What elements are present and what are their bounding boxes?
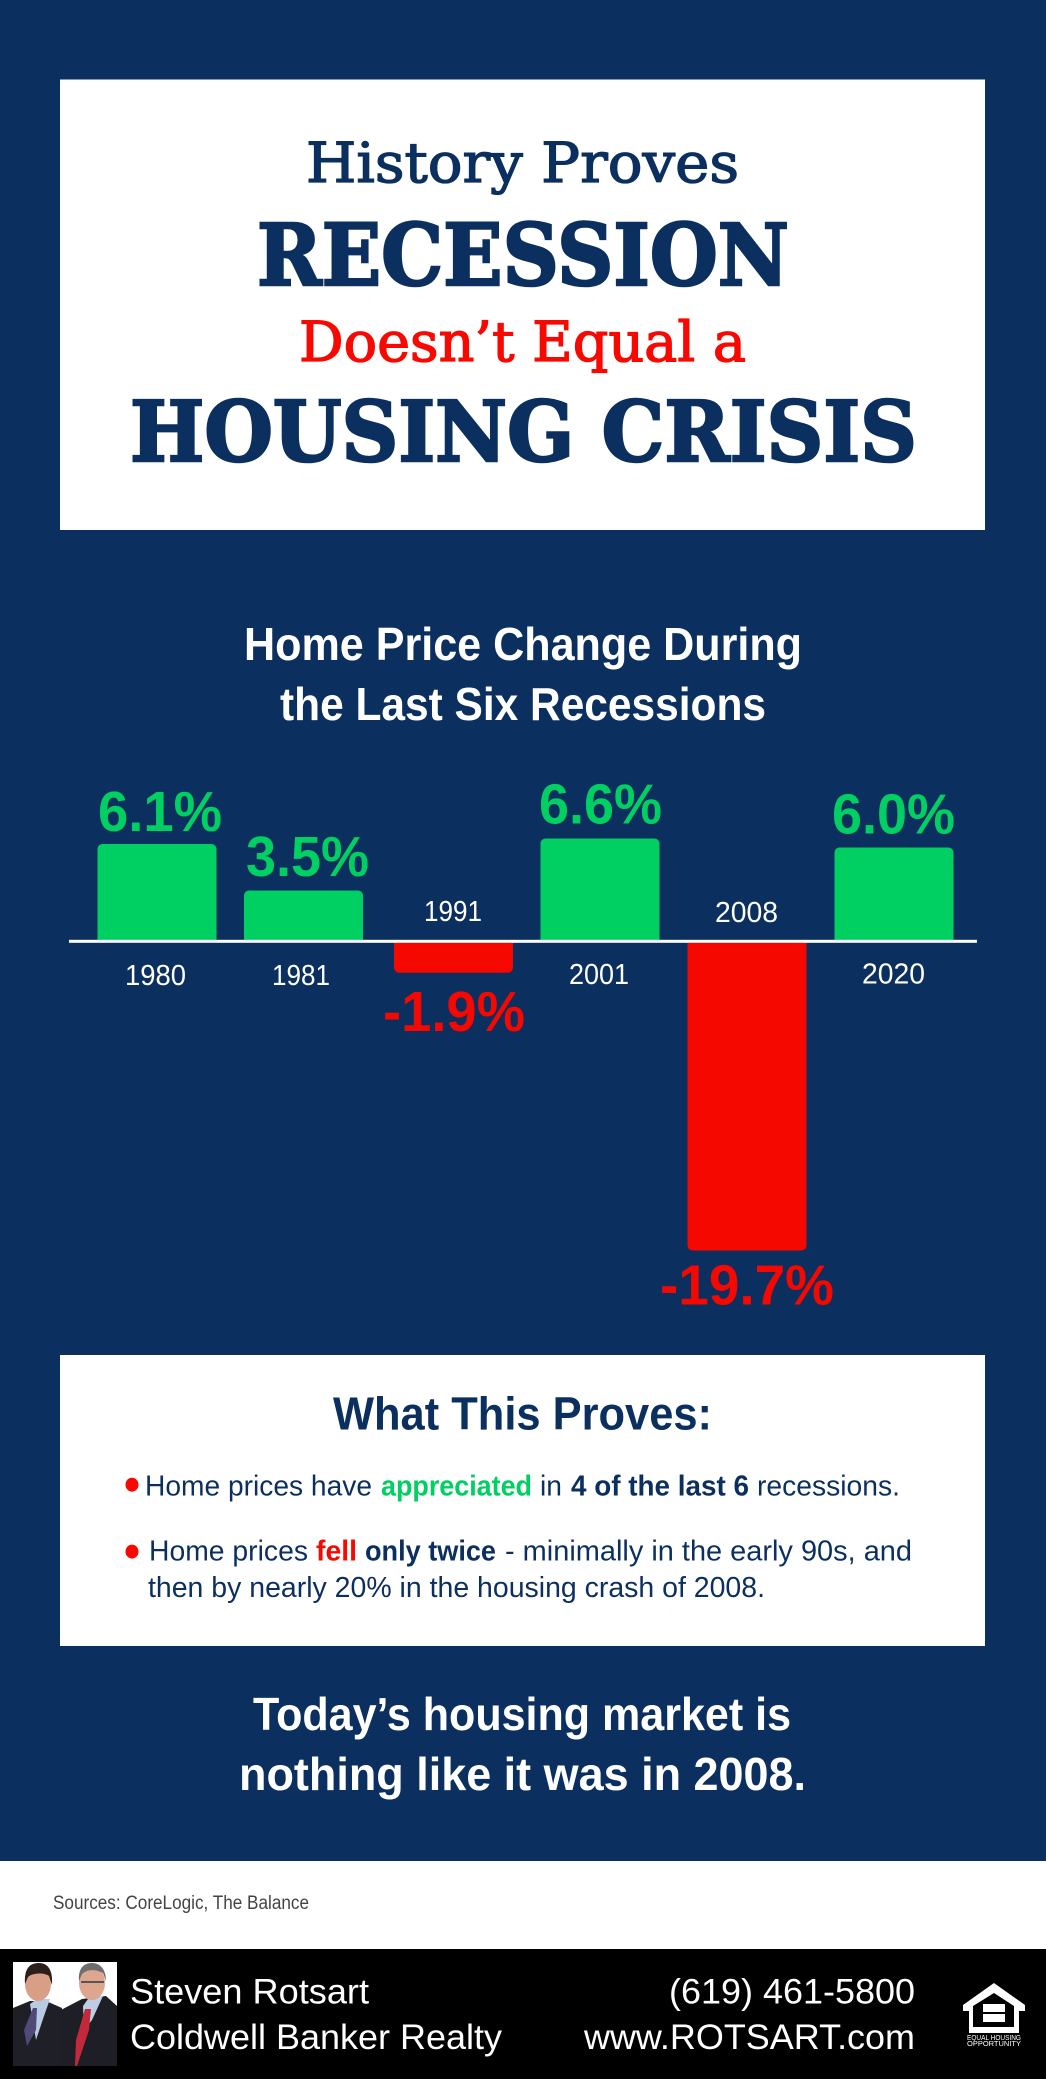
bullet point 1: Home prices have (145, 1470, 372, 1502)
bar: 1991 (383, 896, 525, 1044)
chart axis (69, 940, 977, 943)
bar: 2008 (660, 897, 834, 1318)
bar: 1991: 1991 (424, 896, 482, 928)
bar: 2008: 2008 (715, 897, 778, 929)
closing statement: nothing like it was in 2008. (239, 1748, 806, 1800)
bullet point 2 (126, 1536, 912, 1604)
bar: 1981 (244, 825, 369, 992)
icon: equal housing opportunity: EQUAL HOUSING (967, 2035, 1021, 2042)
icon: equal housing opportunity (963, 1983, 1025, 2048)
title line: RECESSION: RECESSION (257, 206, 789, 306)
heading: chart title: Home Price Change During (244, 618, 802, 670)
bar: 2001: 6.6% (539, 772, 662, 836)
bar: 2008: -19.7% (660, 1254, 834, 1318)
title line: History Proves: History Proves (306, 131, 739, 195)
bullet point 1: 4 of the last 6 (571, 1470, 749, 1502)
phone: (619) 461-5800 (669, 1972, 915, 2012)
panel: what this proves (60, 1355, 985, 1646)
agent name: Steven Rotsart (130, 1972, 369, 2012)
bar: 1991: -1.9% (383, 980, 525, 1044)
bullet point 1: appreciated (381, 1470, 532, 1502)
bullet point 2: fell (316, 1536, 357, 1568)
bar: 2020: 2020 (862, 958, 925, 990)
bar: 2020 (832, 782, 955, 990)
bullet point 2: - minimally in the early 90s, and (505, 1536, 912, 1568)
brokerage: Coldwell Banker Realty (130, 2018, 503, 2057)
bullet point 2: only twice (365, 1536, 496, 1568)
agent footer (0, 1949, 1046, 2079)
panel heading: What This Proves: (333, 1388, 712, 1440)
bar: 1981: 3.5% (246, 825, 369, 889)
bar: 1980 (98, 780, 222, 992)
title line: HOUSING CRISIS: HOUSING CRISIS (130, 383, 917, 481)
icon: equal housing opportunity: OPPORTUNITY (967, 2041, 1021, 2048)
heading: chart title: the Last Six Recessions (280, 678, 766, 730)
sources strip (0, 1861, 1046, 1949)
bullet point 1: in (540, 1470, 562, 1502)
bar: 1980: 1980 (125, 960, 186, 992)
bar: 2001: 2001 (569, 959, 629, 991)
bullet point 1: recessions. (757, 1470, 900, 1502)
bar: 2020: 6.0% (832, 782, 955, 846)
title line: Doesn't Equal a: Doesn’t Equal a (299, 310, 746, 374)
closing statement: Today’s housing market is (253, 1688, 791, 1740)
bullet point 2: then by nearly 20% in the housing crash of 2008. (148, 1572, 765, 1604)
bar: 1981: 1981 (272, 960, 330, 992)
heading: chart title (244, 618, 802, 730)
sources strip: Sources: CoreLogic, The Balance (53, 1893, 309, 1914)
bar: 2001 (539, 772, 662, 991)
bar: 1980: 6.1% (98, 780, 222, 844)
photo: two agents (13, 1962, 117, 2066)
bullet point 1 (126, 1470, 900, 1502)
bar chart (69, 772, 977, 1318)
bullet point 2: Home prices (149, 1536, 308, 1568)
panel: title (60, 80, 985, 530)
closing statement (239, 1688, 806, 1800)
website: www.ROTSART.com (583, 2018, 915, 2057)
